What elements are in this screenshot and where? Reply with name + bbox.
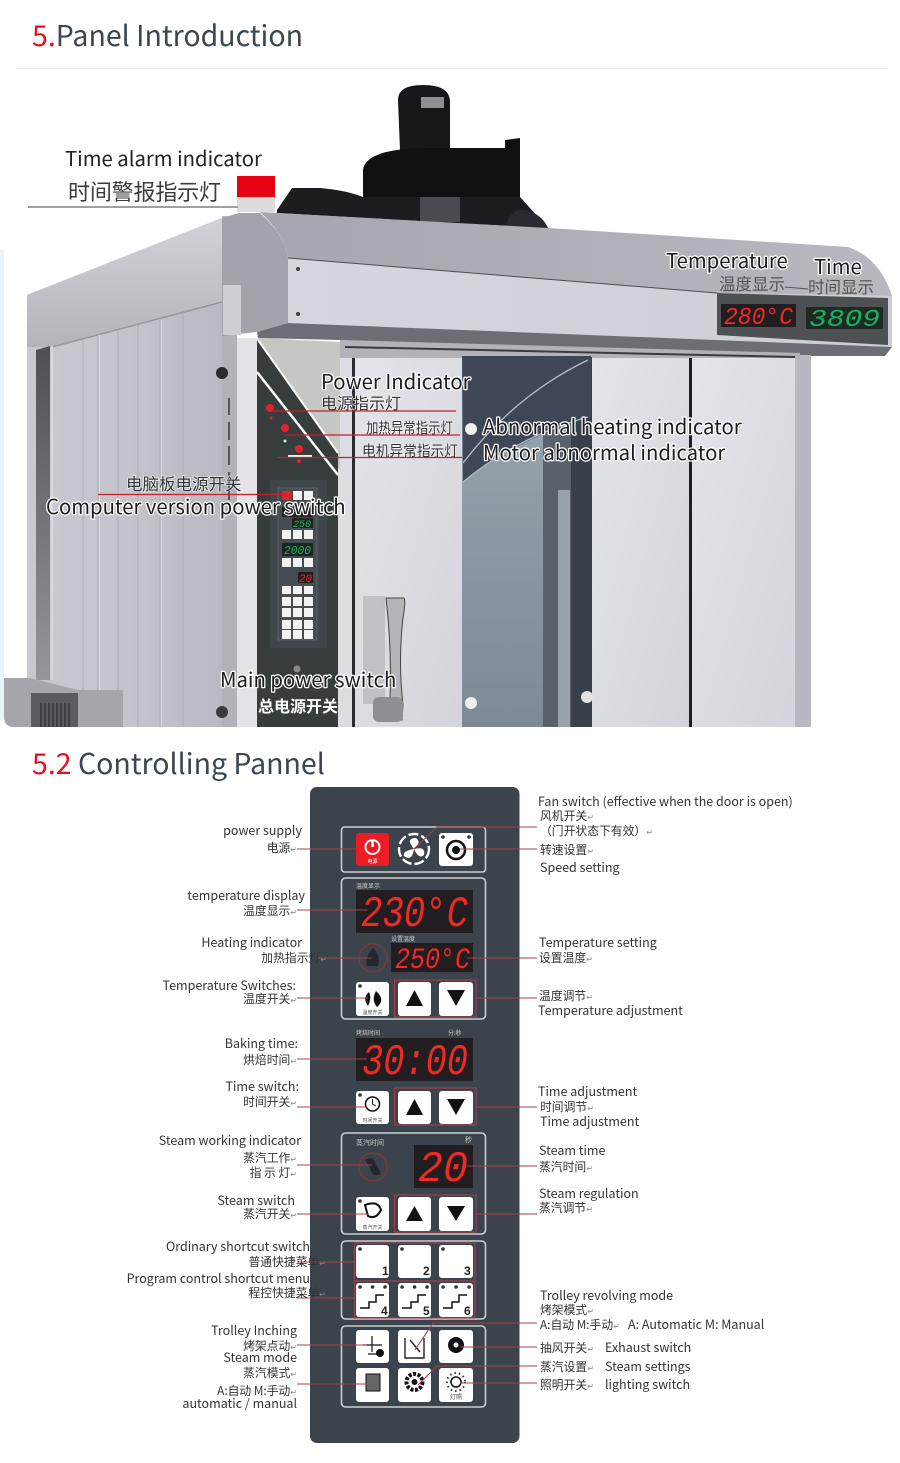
steam time readout: 20 bbox=[418, 1145, 468, 1195]
labels: right column: 温度调节↵ bbox=[539, 987, 593, 1004]
icon: door hinges bbox=[216, 367, 228, 718]
oven left side panel bbox=[4, 216, 237, 727]
labels: left column: power supply bbox=[223, 820, 302, 839]
labels: left column: 温度开关↵ bbox=[243, 990, 297, 1007]
labels: left column: 时间开关↵ bbox=[243, 1093, 297, 1110]
icon: fan switch bbox=[399, 834, 429, 864]
time buttons: 时间开关 bbox=[362, 1117, 383, 1124]
labels: right column: 设置温度↵ bbox=[539, 949, 593, 966]
labels: left column bbox=[127, 820, 327, 1412]
group: shortcut buttons: 1 bbox=[382, 1264, 389, 1278]
group: baking time: 烤焙时间 bbox=[356, 1028, 380, 1037]
callout: power and fault indicators: 电源指示灯 bbox=[321, 390, 401, 414]
labels: left column: 烘焙时间↵ bbox=[243, 1051, 297, 1068]
callout: temperature and time bbox=[666, 244, 874, 298]
labels: right column: Temperature adjustment bbox=[538, 1000, 683, 1019]
callout: temperature and time: 温度显示 bbox=[719, 271, 785, 295]
door handle bbox=[363, 596, 405, 722]
steam buttons: 蒸汽开关 bbox=[362, 1224, 383, 1231]
callout: temperature and time: Time bbox=[814, 250, 862, 280]
steam buttons bbox=[356, 1195, 476, 1232]
labels: left column: A:自动 M:手动↵ bbox=[217, 1382, 297, 1399]
callout: temperature and time: Temperature bbox=[666, 244, 788, 274]
labels: right column: 烤架模式↵ bbox=[540, 1301, 594, 1318]
labels: left column: 普通快捷菜单↵ bbox=[248, 1253, 326, 1270]
labels: right column: Steam regulation bbox=[539, 1183, 639, 1202]
labels: right column: Fan switch (effective when the door is open) bbox=[538, 791, 793, 810]
labels: left column: automatic / manual bbox=[182, 1393, 297, 1412]
group: shortcut buttons: 4 bbox=[381, 1304, 388, 1318]
labels: right column: 蒸汽调节↵ bbox=[539, 1199, 593, 1216]
temperature setting readout: 250°C bbox=[395, 944, 470, 978]
labels: right column bbox=[538, 791, 793, 1393]
icon: power button bbox=[356, 833, 389, 866]
labels: right column: 转速设置↵ bbox=[540, 841, 594, 858]
mini control panel bbox=[270, 480, 327, 648]
labels: left column: Time switch: bbox=[225, 1076, 299, 1095]
callout: main power switch: Main power switch bbox=[220, 663, 396, 693]
group: shortcut buttons: 6 bbox=[464, 1304, 471, 1318]
labels: right column: A:自动 M:手动↵ bbox=[540, 1316, 620, 1333]
callout: time alarm indicator bbox=[28, 142, 275, 212]
base machine bbox=[4, 678, 123, 727]
labels: right column: A: Automatic M: Manual bbox=[628, 1314, 764, 1333]
icon: speed button bbox=[439, 833, 473, 866]
oven hood with display bbox=[222, 212, 892, 356]
labels: left column: Program control shortcut menu bbox=[127, 1268, 310, 1287]
group: baking time bbox=[356, 1028, 476, 1125]
callout: computer version power switch: Computer version power switch bbox=[46, 490, 346, 520]
group: shortcut buttons: 2 bbox=[423, 1264, 430, 1278]
labels: left column: 指 示 灯↵ bbox=[250, 1164, 297, 1181]
labels: right column: Time adjustment bbox=[538, 1081, 637, 1100]
group: baking time: 分:秒 bbox=[448, 1028, 462, 1037]
callout: power and fault indicators: Motor abnormal indicator bbox=[483, 436, 725, 466]
labels: right column: Exhaust switch bbox=[605, 1337, 691, 1356]
callout: time alarm indicator: Time alarm indicator bbox=[65, 142, 262, 172]
labels: right column: 抽风开关↵ bbox=[540, 1339, 594, 1356]
mini control panel: 2000 bbox=[284, 544, 311, 558]
labels: right column: Trolley revolving mode bbox=[540, 1285, 673, 1304]
group: steam: 秒 bbox=[465, 1135, 472, 1145]
labels: left column: Trolley Inching bbox=[211, 1320, 297, 1339]
labels: left column: Temperature Switches: bbox=[162, 975, 296, 994]
callout: power and fault indicators: 电机异常指示灯 bbox=[362, 440, 458, 461]
labels: left column: Ordinary shortcut switch bbox=[166, 1236, 310, 1255]
labels: right column: Steam time bbox=[539, 1140, 606, 1159]
group: temperature: 温度显示 bbox=[356, 881, 380, 890]
mini control panel: 20 bbox=[299, 574, 312, 586]
group: function buttons bbox=[342, 1326, 486, 1407]
callout: power and fault indicators: Power Indicator bbox=[321, 365, 471, 395]
group: shortcut buttons bbox=[342, 1241, 486, 1319]
callout: power and fault indicators: Abnormal heating indicator bbox=[483, 410, 742, 440]
group: shortcut buttons: 5 bbox=[423, 1304, 430, 1318]
callout: power and fault indicators: 加热异常指示灯 bbox=[366, 417, 453, 438]
mini control panel: 250 bbox=[293, 520, 311, 531]
labels: right column: Temperature setting bbox=[539, 932, 657, 951]
labels: left column: Baking time: bbox=[225, 1033, 298, 1052]
labels: left column: Steam mode bbox=[223, 1347, 297, 1366]
labels: left column: 加热指示灯↵ bbox=[261, 949, 327, 966]
callout lines bbox=[297, 827, 537, 1385]
labels: left column: 蒸汽模式↵ bbox=[243, 1364, 297, 1381]
labels: left column: 烤架点动↵ bbox=[243, 1337, 297, 1354]
callout: computer version power switch: 电脑板电源开关 bbox=[126, 471, 242, 495]
labels: right column: （门开状态下有效）↵ bbox=[540, 822, 653, 839]
panel: oven photo bbox=[0, 85, 892, 727]
title: 5.2 Controlling Pannel: 5.2 Controlling Pannel bbox=[32, 742, 325, 783]
labels: left column: 程控快捷菜单↵ bbox=[248, 1284, 326, 1301]
icon: power button: 电源 bbox=[367, 858, 378, 865]
group: temperature bbox=[342, 878, 486, 1019]
panel: control panel diagram bbox=[310, 787, 520, 1443]
labels: left column: 电源↵ bbox=[267, 839, 297, 856]
baking time readout: 30:00 bbox=[362, 1038, 468, 1088]
glass door bbox=[462, 356, 593, 727]
labels: right column: Speed setting bbox=[540, 857, 620, 876]
callout: temperature and time: 时间显示 bbox=[808, 274, 874, 298]
labels: left column: Heating indicator bbox=[201, 932, 302, 951]
labels: left column: 蒸汽开关↵ bbox=[243, 1205, 297, 1222]
callout: main power switch: 总电源开关 bbox=[258, 693, 338, 717]
labels: right column: 蒸汽时间↵ bbox=[539, 1158, 593, 1175]
labels: left column: temperature display bbox=[187, 885, 305, 904]
callout: power and fault indicators bbox=[272, 365, 742, 466]
icon: heating indicator bbox=[359, 944, 387, 972]
labels: left column: Steam working indicator bbox=[159, 1130, 301, 1149]
title: 5.Panel Introduction: 5.Panel Introduction bbox=[32, 14, 303, 55]
labels: right column: 照明开关↵ bbox=[540, 1376, 594, 1393]
labels: left column: 温度显示↵ bbox=[243, 902, 297, 919]
labels: right column: 风机开关↵ bbox=[540, 807, 594, 824]
temperature and time readout bbox=[717, 293, 888, 345]
labels: right column: 蒸汽设置↵ bbox=[540, 1358, 594, 1375]
group: steam: 蒸汽时间 bbox=[356, 1138, 384, 1148]
group: shortcut buttons: 3 bbox=[464, 1264, 471, 1278]
temperature buttons: 温度开关 bbox=[362, 1009, 383, 1016]
temperature buttons bbox=[356, 980, 476, 1017]
callout: main power switch bbox=[220, 663, 396, 717]
labels: right column: Time adjustment bbox=[540, 1111, 639, 1130]
labels: right column: 时间调节↵ bbox=[540, 1098, 594, 1115]
labels: left column: 蒸汽工作↵ bbox=[243, 1149, 297, 1166]
oven doors bbox=[237, 338, 811, 727]
temperature and time readout: 3809 bbox=[809, 307, 880, 334]
control column on oven bbox=[257, 338, 340, 727]
group: temperature: 设置温度 bbox=[391, 934, 415, 943]
group: steam bbox=[342, 1133, 486, 1234]
callout: computer version power switch bbox=[46, 471, 346, 520]
icon: steam indicator bbox=[359, 1153, 387, 1181]
callout: time alarm indicator: 时间警报指示灯 bbox=[68, 175, 221, 207]
labels: right column: lighting switch bbox=[605, 1374, 690, 1393]
oven blower motor bbox=[277, 85, 548, 228]
group: power fan speed bbox=[342, 827, 486, 872]
group: function buttons: 灯照 bbox=[450, 1392, 462, 1401]
labels: right column: Steam settings bbox=[605, 1356, 691, 1375]
temperature readout: 230°C bbox=[361, 890, 468, 940]
temperature and time readout: 280°C bbox=[724, 305, 794, 332]
labels: left column: Steam switch bbox=[217, 1190, 295, 1209]
